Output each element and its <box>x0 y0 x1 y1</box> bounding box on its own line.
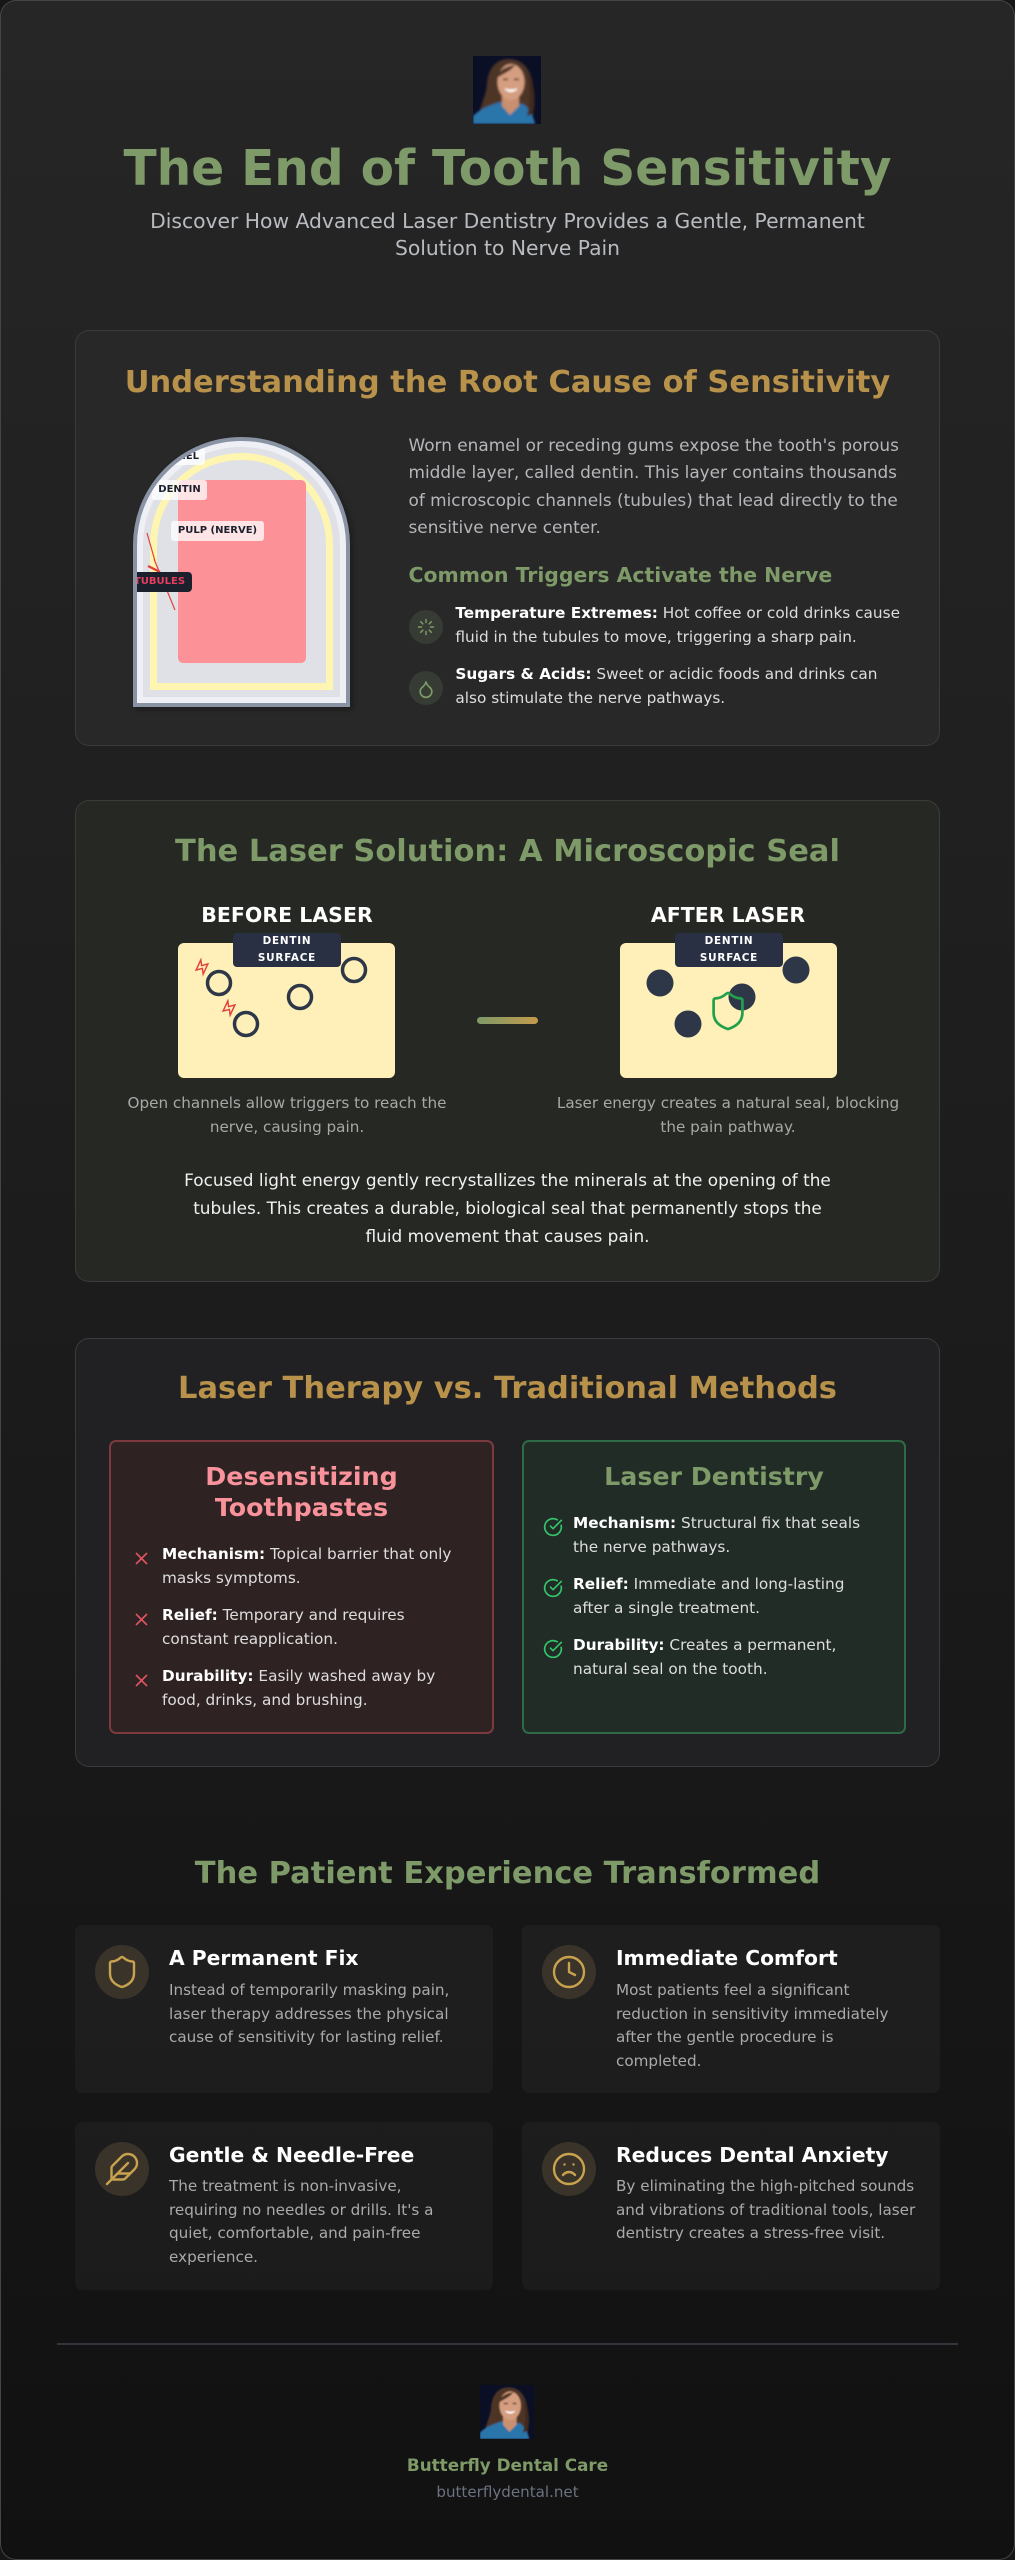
card text: Most patients feel a significant <box>616 1981 850 1999</box>
label: pulp <box>171 521 264 541</box>
item: relief <box>573 1575 844 1616</box>
trigger: temperature extremes <box>455 604 900 646</box>
caption: before <box>128 1094 446 1136</box>
item: mechanism: masks symptoms. <box>162 1568 301 1586</box>
card title: Toothpastes <box>215 1493 388 1522</box>
heading: laser solution: The Laser Solution: A Microscopic Seal <box>175 834 840 869</box>
footer: practice name: Butterfly Dental Care <box>407 2455 608 2475</box>
trigger: sugars and acids <box>455 665 878 706</box>
card text: laser therapy addresses the physical <box>169 2004 449 2022</box>
label: dentin <box>152 480 207 500</box>
item: durability: Durability: Creates a permanent, <box>573 1636 836 1654</box>
card title: Desensitizing <box>205 1462 398 1491</box>
card text: experience. <box>169 2248 258 2266</box>
text: explanation: middle layer, called dentin. This layer contains thousands <box>408 462 897 482</box>
trigger: temperature extremes: Temperature Extremes: Hot coffee or cold drinks cause <box>455 604 900 622</box>
text: explanation <box>408 435 899 537</box>
trigger: sugars and acids: Sugars & Acids: Sweet or acidic foods and drinks can <box>455 665 878 683</box>
card title: Gentle & Needle-Free <box>169 2143 414 2167</box>
icon: clock <box>542 1945 596 1999</box>
diagram: before laser dentin <box>178 933 395 1078</box>
item: durability: food, drinks, and brushing. <box>162 1690 368 1708</box>
item: mechanism: Mechanism: Topical barrier that only <box>162 1545 451 1563</box>
trigger: sugars and acids: also stimulate the nerve pathways. <box>455 688 725 706</box>
arrow: gradient connector <box>477 1017 538 1024</box>
icon: x <box>136 1552 148 1565</box>
panel: the laser solution <box>75 800 940 1282</box>
label: dentin surface <box>675 933 783 967</box>
heading: comparison: Laser Therapy vs. Traditional Methods <box>178 1371 837 1406</box>
icon: check <box>544 1518 562 1536</box>
label: after laser: AFTER LASER <box>651 903 805 927</box>
header photo: dentist portrait <box>473 56 541 124</box>
subtitle: Solution to Nerve Pain <box>395 236 620 260</box>
card text: By eliminating the high-pitched sounds <box>616 2177 914 2195</box>
card text: dentistry creates a stress-free visit. <box>616 2224 885 2242</box>
label: dentin surface: DENTIN <box>705 935 753 947</box>
label: enamel: ENAMEL <box>153 451 199 462</box>
card title: A Permanent Fix <box>169 1946 358 1970</box>
item: relief: constant reapplication. <box>162 1630 338 1648</box>
item: mechanism <box>162 1545 451 1586</box>
heading: understanding the root cause: Understanding the Root Cause of Sensitivity <box>125 365 890 400</box>
item: mechanism: the nerve pathways. <box>573 1538 730 1556</box>
card: reduces dental anxiety <box>522 2122 940 2290</box>
card text <box>616 2177 916 2242</box>
caption: after: Laser energy creates a natural seal, blocking <box>557 1094 899 1112</box>
card text: The treatment is non-invasive, <box>169 2177 402 2195</box>
icon: frown <box>542 2142 596 2196</box>
card text <box>169 1981 449 2046</box>
item: relief: Relief: Immediate and long-lasting <box>573 1575 844 1593</box>
card text: quiet, comfortable, and pain-free <box>169 2224 420 2242</box>
card: a permanent fix <box>75 1925 493 2093</box>
icon: shield <box>95 1945 149 1999</box>
panel: laser therapy vs traditional methods <box>75 1338 940 1767</box>
card title: Laser Dentistry <box>604 1462 824 1491</box>
label: before laser: BEFORE LASER <box>201 903 373 927</box>
icon: droplet <box>409 671 443 705</box>
card title: Reduces Dental Anxiety <box>616 2143 888 2167</box>
trigger: temperature extremes: fluid in the tubules to move, triggering a sharp pain. <box>455 628 857 646</box>
item: durability <box>573 1636 836 1678</box>
item: relief <box>162 1606 405 1648</box>
card title: Immediate Comfort <box>616 1946 838 1970</box>
label: dentin surface: DENTIN <box>263 935 311 947</box>
footer: website: butterflydental.net <box>436 2483 579 2501</box>
item: durability <box>162 1667 435 1708</box>
item: mechanism <box>573 1514 860 1556</box>
subtitle <box>150 208 865 260</box>
subtitle: Discover How Advanced Laser Dentistry Provides a Gentle, Permanent <box>150 208 865 232</box>
item: relief: after a single treatment. <box>573 1598 760 1616</box>
panel: root cause of sensitivity <box>75 330 940 746</box>
text: explanation: Worn enamel or receding gums expose the tooth's porous <box>408 435 899 455</box>
label: dentin: DENTIN <box>158 484 201 495</box>
label: dentin surface: SURFACE <box>258 952 316 964</box>
heading: patient experience: The Patient Experience Transformed <box>195 1856 820 1891</box>
diagram: after laser dentin <box>620 933 837 1078</box>
text: how the laser works <box>184 1170 831 1246</box>
icon: temperature <box>409 610 443 644</box>
card: desensitizing toothpastes <box>109 1440 494 1734</box>
title: The End of Tooth Sensitivity <box>123 141 892 197</box>
icon: check <box>544 1578 562 1598</box>
item: relief: Relief: Temporary and requires <box>162 1606 405 1624</box>
icon: x <box>136 1613 148 1626</box>
label: dentin surface <box>233 933 341 967</box>
text: explanation: of microscopic channels (tubules) that lead directly to the <box>408 490 898 510</box>
card: laser dentistry <box>522 1440 906 1734</box>
caption: after: the pain pathway. <box>660 1118 796 1136</box>
icon: x <box>136 1674 148 1687</box>
label: pulp: PULP (NERVE) <box>178 525 257 536</box>
item: durability: natural seal on the tooth. <box>573 1660 768 1678</box>
caption: before: nerve, causing pain. <box>210 1118 364 1136</box>
card text: Instead of temporarily masking pain, <box>169 1981 449 1999</box>
card text: and vibrations of traditional tools, laser <box>616 2200 915 2218</box>
label: enamel <box>147 448 205 465</box>
label: dentin surface: SURFACE <box>700 952 758 964</box>
card text: after the gentle procedure is <box>616 2028 833 2046</box>
icon: check <box>544 1640 562 1658</box>
label: tubules <box>127 572 192 592</box>
card text <box>168 2177 433 2266</box>
subheading: common triggers: Common Triggers Activate the Nerve <box>408 563 832 587</box>
card text: requiring no needles or drills. It's a <box>169 2200 433 2218</box>
footer photo: dentist portrait <box>480 2385 534 2439</box>
card text: completed. <box>616 2052 701 2070</box>
text: how the laser works: tubules. This creates a durable, biological seal that permanently stops the <box>193 1198 822 1218</box>
icon: feather <box>95 2142 149 2196</box>
card text: cause of sensitivity for lasting relief. <box>169 2028 444 2046</box>
text: how the laser works: fluid movement that causes pain. <box>365 1226 650 1246</box>
card: gentle and needle-free <box>75 2122 493 2290</box>
card text <box>616 1981 888 2070</box>
card text: reduction in sensitivity immediately <box>616 2004 888 2022</box>
label: tubules: TUBULES <box>134 576 185 587</box>
text: explanation: sensitive nerve center. <box>408 517 601 537</box>
caption: after <box>557 1094 899 1136</box>
card: immediate comfort <box>522 1925 940 2093</box>
card title <box>205 1462 398 1522</box>
item: mechanism: Mechanism: Structural fix that seals <box>573 1514 860 1532</box>
caption: before: Open channels allow triggers to reach the <box>128 1094 446 1112</box>
text: how the laser works: Focused light energy gently recrystallizes the minerals at the opening of the <box>184 1170 831 1190</box>
diagram: tooth cross-section <box>133 437 350 707</box>
item: durability: Durability: Easily washed away by <box>162 1667 435 1685</box>
